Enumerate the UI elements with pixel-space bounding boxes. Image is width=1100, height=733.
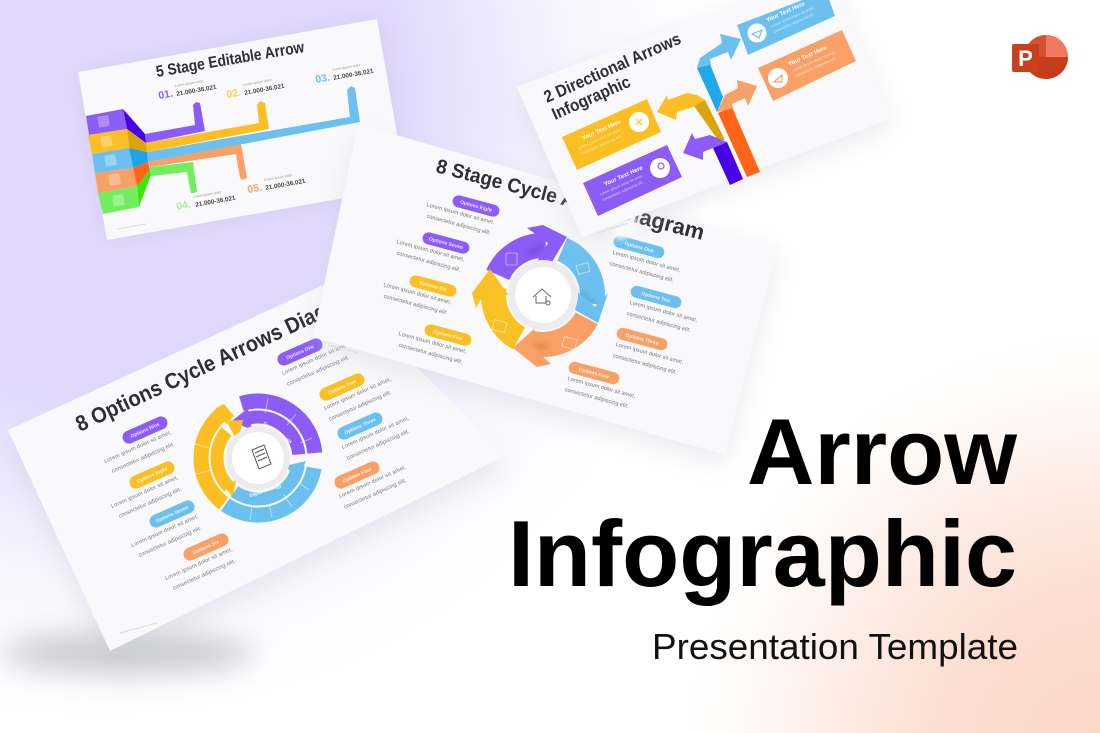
option: one: Lorem ipsum dolor sit amet, xyxy=(612,250,681,274)
option: eight xyxy=(423,188,501,237)
slide: 5 stage editable arrow xyxy=(78,19,406,240)
box: purple: consectetur adipiscing elit. xyxy=(602,180,644,202)
option: eight xyxy=(104,459,185,521)
option: six: Options Six xyxy=(419,280,447,293)
label 03 xyxy=(314,61,375,86)
notch shading xyxy=(528,246,594,347)
blue arcs: Digital Strategy xyxy=(249,483,282,498)
box: blue: consectetur adipiscing elit. xyxy=(773,12,815,34)
box: purple: Lorem ipsum dolor sit amet, xyxy=(599,174,644,197)
label 05: 21.000-36.021 xyxy=(265,178,307,192)
box: yellow: consectetur adipiscing elit. xyxy=(580,134,622,156)
title: 5 stage: 5 Stage Editable Arrow xyxy=(155,39,306,81)
option: six xyxy=(380,268,458,317)
option: six xyxy=(158,531,239,593)
label 01: 01. xyxy=(157,88,174,102)
box: yellow: Lorem ipsum dolor sit amet, xyxy=(577,128,622,151)
icon: PowerPoint logo xyxy=(1012,35,1068,79)
icons on segments xyxy=(492,253,590,350)
option: three: Lorem ipsum dolor sit amet, xyxy=(341,415,411,451)
icon: document xyxy=(252,445,271,469)
label 01: Lorem ipsum dolor xyxy=(175,79,205,88)
option: three: Options Three xyxy=(625,332,659,347)
title: 8 stage: 8 Stage Cycle Arrow xyxy=(434,156,618,223)
box: orange xyxy=(758,30,856,101)
option: five: Options Five xyxy=(432,329,463,343)
yellow arcs xyxy=(195,404,243,504)
arrow: blue up xyxy=(697,34,741,112)
option: two: Lorem ipsum dolor sit amet, xyxy=(323,376,393,412)
option: one xyxy=(275,326,356,388)
title line 2: Infographic xyxy=(549,72,633,124)
cycle arrows xyxy=(472,225,608,367)
option: six: consectetur adipiscing elit. xyxy=(383,294,449,317)
title: 8 stage: Diagram xyxy=(616,199,707,245)
slide: 2 directional arrows infographic xyxy=(517,0,893,245)
box: orange: Lorem ipsum dolor sit amet, xyxy=(792,50,837,72)
option: eight: Options Eight xyxy=(459,200,493,214)
option: seven: consectetur adipiscing elit. xyxy=(138,525,203,559)
purple arcs: Data & Analysis xyxy=(262,421,293,445)
band: yellow xyxy=(493,286,519,338)
option: four: Lorem ipsum dolor sit amet, xyxy=(567,376,636,400)
option: two: Options Two xyxy=(641,291,671,304)
option: five: Lorem ipsum dolor sit amet, xyxy=(398,331,467,355)
box: blue xyxy=(737,0,835,55)
option: nine: Lorem ipsum dolor sit amet, xyxy=(103,430,173,465)
slide: 8 options cycle arrows diagram xyxy=(8,282,507,665)
box: orange: Your Text Here xyxy=(787,45,829,68)
label 02: 21.000-36.021 xyxy=(244,83,286,97)
option: four xyxy=(332,449,413,511)
label 04: 21.000-36.021 xyxy=(195,195,237,209)
option: eight: Lorem ipsum dolor sit amet, xyxy=(110,475,180,510)
option: nine: consectetur adipiscing elit. xyxy=(111,441,176,475)
option: seven: Options Seven xyxy=(428,236,464,251)
box: blue: Lorem ipsum dolor sit amet, xyxy=(770,6,815,28)
option: four: consectetur adipiscing elit. xyxy=(343,477,408,511)
label 04: Lorem ipsum dolor xyxy=(193,190,223,199)
band: orange xyxy=(530,318,587,344)
arrow: purple xyxy=(145,102,205,143)
band: purple xyxy=(498,246,546,275)
title: 2 directional: 2 Directional Arrows xyxy=(541,29,684,107)
head: blue xyxy=(575,290,608,323)
slide: 8 stage cycle arrow diagram xyxy=(313,124,778,465)
option: five xyxy=(395,317,473,366)
heading: Arrow: Arrow xyxy=(747,399,1017,504)
option: one: consectetur adipiscing elit. xyxy=(286,354,351,388)
label 04: 04. xyxy=(175,199,192,213)
ring chart xyxy=(195,399,315,520)
label 05 xyxy=(246,171,307,196)
option: two: consectetur adipiscing elit. xyxy=(626,311,692,334)
option: one: Options One xyxy=(624,241,654,255)
option: seven: consectetur adipiscing elit. xyxy=(396,251,462,274)
box: purple: Your Text Here xyxy=(603,165,645,188)
option: four: consectetur adipiscing elit. xyxy=(564,387,630,410)
option: four: Options Four xyxy=(342,466,373,485)
option: one: consectetur adipiscing elit. xyxy=(609,261,675,284)
option: four: Lorem ipsum dolor sit amet, xyxy=(338,464,408,500)
footer rule xyxy=(120,623,157,633)
subtitle: Presentation Template xyxy=(652,626,1018,667)
label 03: 21.000-36.021 xyxy=(333,68,375,82)
option: three: Lorem ipsum dolor sit amet, xyxy=(615,342,684,366)
option: four: Options Four xyxy=(578,367,610,381)
label 02 xyxy=(225,76,286,101)
arrow: orange xyxy=(148,144,247,180)
option: seven: Lorem ipsum dolor sit amet, xyxy=(396,239,465,263)
label 04 xyxy=(175,188,237,213)
label 02: 02. xyxy=(225,87,242,101)
option: one xyxy=(607,234,685,285)
option: seven xyxy=(124,498,205,560)
box: yellow xyxy=(562,99,661,170)
option: two: Options Two xyxy=(327,379,357,396)
option: two: consectetur adipiscing elit. xyxy=(328,389,393,423)
label 02: Lorem ipsum dolor xyxy=(243,78,273,87)
option: eight: consectetur adipiscing elit. xyxy=(118,486,183,520)
icon: house xyxy=(533,289,551,305)
option: two xyxy=(317,361,398,423)
option: three xyxy=(335,400,416,462)
box icons xyxy=(636,30,782,169)
option: four xyxy=(562,360,640,411)
center hub xyxy=(508,260,578,330)
option: nine: Options Nine xyxy=(130,421,161,440)
option: three: consectetur adipiscing elit. xyxy=(346,428,411,462)
option: nine xyxy=(97,414,178,476)
option: five: consectetur adipiscing elit. xyxy=(398,343,464,366)
option: six: Lorem ipsum dolor sit amet, xyxy=(383,282,452,306)
arrow: yellow xyxy=(146,101,269,152)
option: three: Options Three xyxy=(344,417,377,436)
box: orange: consectetur adipiscing elit. xyxy=(795,56,837,78)
head: orange xyxy=(513,328,551,367)
arrow: purple left xyxy=(683,133,743,185)
title: 8 options: 8 Options Cycle Arrows Diagram xyxy=(72,282,364,437)
arrow: orange right xyxy=(717,80,760,177)
arrow: yellow left xyxy=(657,93,725,140)
heading: Infographic: Infographic xyxy=(508,501,1017,606)
icon: PowerPoint logo: P xyxy=(1018,46,1033,71)
stacked blocks xyxy=(86,109,151,214)
center hub xyxy=(226,426,290,490)
option: seven: Lorem ipsum dolor sit amet, xyxy=(130,514,200,549)
option: six: Lorem ipsum dolor sit amet, xyxy=(164,547,234,582)
head: yellow xyxy=(472,269,510,308)
band: blue xyxy=(562,249,592,304)
option: six: Options Six xyxy=(192,539,220,556)
label 05: 05. xyxy=(246,182,263,196)
label 01 xyxy=(157,77,218,102)
option: eight: Lorem ipsum dolor sit amet, xyxy=(426,202,495,226)
arrow: green xyxy=(150,162,197,193)
head: purple xyxy=(527,225,567,265)
box: blue: Your Text Here xyxy=(765,1,807,24)
option: two: Lorem ipsum dolor sit amet, xyxy=(629,300,698,324)
option: eight: Options Eight xyxy=(136,466,169,485)
label 01: 21.000-36.021 xyxy=(176,84,218,98)
label 03: 03. xyxy=(314,72,331,86)
option: two xyxy=(624,284,702,335)
label 03: Lorem ipsum dolor xyxy=(332,63,362,72)
option: three xyxy=(610,326,688,377)
floor shadow xyxy=(3,632,253,674)
option: one: Lorem ipsum dolor sit amet, xyxy=(281,341,351,377)
arrow: blue xyxy=(147,86,360,162)
label 05: Lorem ipsum dolor xyxy=(264,173,294,182)
option: seven xyxy=(393,225,471,274)
option: one: Options One xyxy=(285,344,315,361)
option: seven: Options Seven xyxy=(155,505,189,525)
option: eight: consectetur adipiscing elit. xyxy=(426,214,492,237)
option: three: consectetur adipiscing elit. xyxy=(612,353,678,376)
box: purple xyxy=(583,145,682,216)
option: six: consectetur adipiscing elit. xyxy=(172,558,237,592)
title: 8 stage xyxy=(434,156,707,245)
box: yellow: Your Text Here xyxy=(581,119,623,142)
